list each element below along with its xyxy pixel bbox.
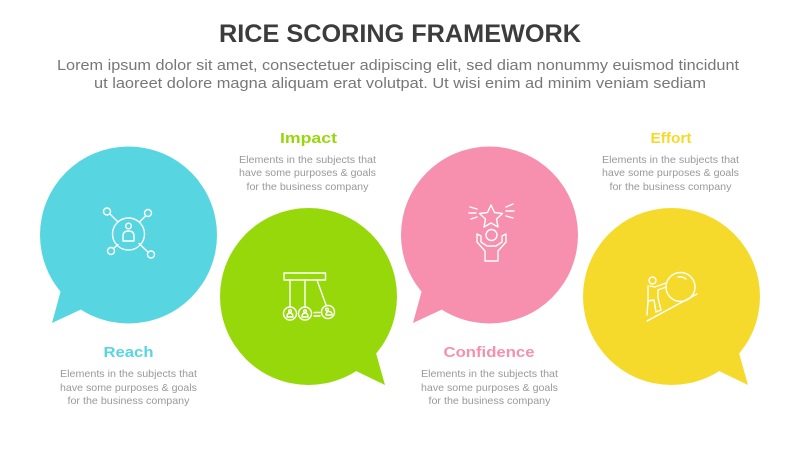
panel: effort bbox=[583, 131, 760, 385]
title: RICE SCORING FRAMEWORK bbox=[219, 20, 581, 48]
subtitle text: Lorem ipsum dolor sit amet, consectetuer adipiscing elit, sed diam nonummy euismod tincidunt bbox=[57, 57, 740, 74]
description: effort: have some purposes & goals bbox=[602, 167, 739, 179]
panel: impact bbox=[220, 131, 397, 385]
description: reach: for the business company bbox=[68, 395, 190, 407]
description: reach: Elements in the subjects that bbox=[60, 368, 197, 380]
icon: hands holding star bbox=[469, 204, 514, 261]
heading: impact: Impact bbox=[280, 131, 337, 147]
speech bubble: confidence bbox=[401, 146, 578, 324]
speech bubble: reach bbox=[40, 146, 217, 324]
description: confidence: for the business company bbox=[428, 395, 551, 407]
description: confidence: have some purposes & goals bbox=[421, 382, 558, 394]
description: reach bbox=[60, 368, 197, 407]
description: confidence bbox=[421, 368, 558, 407]
description: effort bbox=[602, 154, 739, 193]
description: impact: have some purposes & goals bbox=[239, 167, 376, 179]
description: impact bbox=[239, 154, 376, 193]
description: confidence: Elements in the subjects that bbox=[421, 368, 558, 380]
panel: confidence bbox=[401, 146, 578, 407]
icon: newton cradle bbox=[284, 273, 334, 320]
description: effort: for the business company bbox=[610, 181, 732, 193]
icon: network person bbox=[104, 208, 154, 258]
heading: effort: Effort bbox=[650, 131, 692, 147]
description: effort: Elements in the subjects that bbox=[602, 154, 739, 166]
panel: reach bbox=[40, 146, 217, 407]
subtitle text bbox=[57, 57, 740, 92]
description: reach: have some purposes & goals bbox=[60, 382, 197, 394]
icon: person pushing boulder bbox=[647, 272, 697, 321]
heading: reach: Reach bbox=[104, 345, 154, 361]
speech bubble: impact bbox=[220, 208, 397, 385]
heading: confidence: Confidence bbox=[444, 345, 534, 361]
subtitle text: ut laoreet dolore magna aliquam erat volutpat. Ut wisi enim ad minim veniam sediam bbox=[94, 75, 706, 92]
description: impact: for the business company bbox=[246, 181, 369, 193]
speech bubble: effort bbox=[583, 208, 760, 385]
description: impact: Elements in the subjects that bbox=[239, 154, 376, 166]
